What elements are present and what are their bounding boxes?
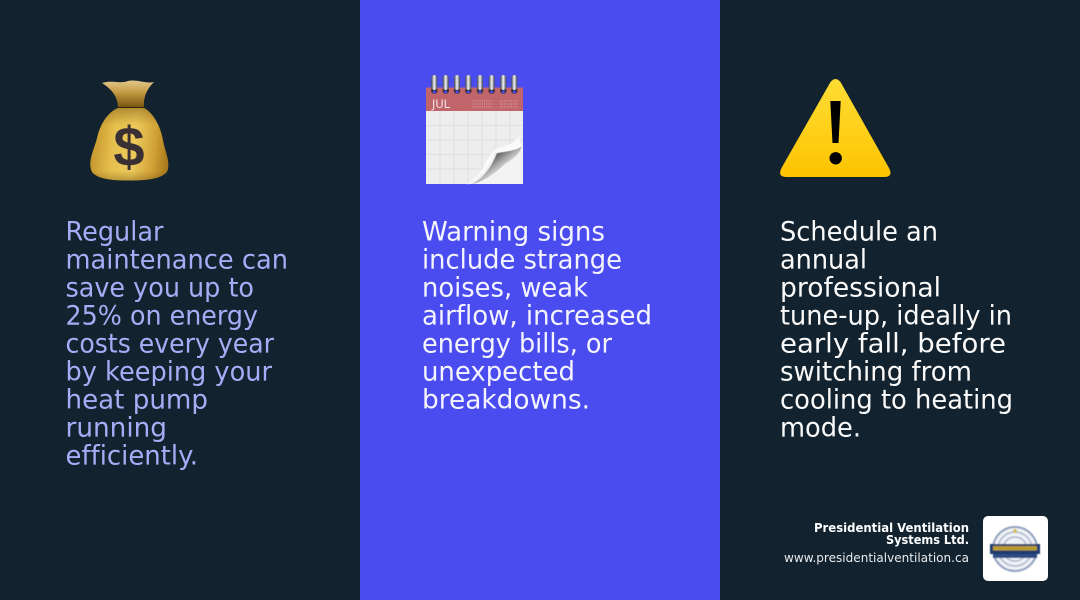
text block: annual tune-up: switching from (780, 356, 972, 388)
text block: warning signs: energy bills, or (422, 328, 613, 360)
icon: money bag (88, 81, 172, 182)
panel: right dark background (720, 0, 1080, 600)
text block: energy savings: running (66, 412, 167, 444)
icon: warning triangle (780, 79, 890, 177)
text block: energy savings: costs every year (66, 328, 275, 360)
text block: warning signs (422, 216, 652, 416)
logo (983, 516, 1048, 581)
text block: annual tune-up: early fall, before (780, 328, 1006, 360)
text block: warning signs: breakdowns. (422, 384, 590, 416)
footer: company name: Systems Ltd. (886, 532, 969, 547)
footer: website: www.presidentialventilation.ca (784, 550, 969, 565)
text block: energy savings: efficiently. (66, 440, 198, 472)
icon: calendar (426, 75, 523, 184)
text block: warning signs: include strange (422, 244, 622, 276)
footer: company name (814, 520, 969, 547)
text block: annual tune-up: tune-up, ideally in (780, 300, 1012, 332)
text block: energy savings: heat pump (66, 384, 208, 416)
panel: centre blue background (360, 0, 720, 600)
text block: annual tune-up: professional (780, 272, 941, 304)
icon: calendar: JUL (431, 97, 451, 111)
text block: annual tune-up: cooling to heating (780, 384, 1013, 416)
text block: warning signs: unexpected (422, 356, 575, 388)
text block: energy savings: maintenance can (66, 244, 288, 276)
icon: money bag: $ (113, 115, 145, 178)
text block: energy savings: 25% on energy (66, 300, 258, 332)
text block: energy savings (66, 216, 288, 472)
text block: energy savings: Regular (66, 216, 164, 248)
text block: annual tune-up: annual (780, 244, 867, 276)
text block: annual tune-up: mode. (780, 412, 861, 444)
footer: company name: Presidential Ventilation (814, 520, 969, 535)
text block: warning signs: noises, weak (422, 272, 588, 304)
text block: warning signs: airflow, increased (422, 300, 652, 332)
panel: left dark background (0, 0, 360, 600)
text block: annual tune-up (780, 216, 1013, 444)
text block: warning signs: Warning signs (422, 216, 605, 248)
text block: energy savings: save you up to (66, 272, 254, 304)
text block: annual tune-up: Schedule an (780, 216, 938, 248)
text block: energy savings: by keeping your (66, 356, 273, 388)
